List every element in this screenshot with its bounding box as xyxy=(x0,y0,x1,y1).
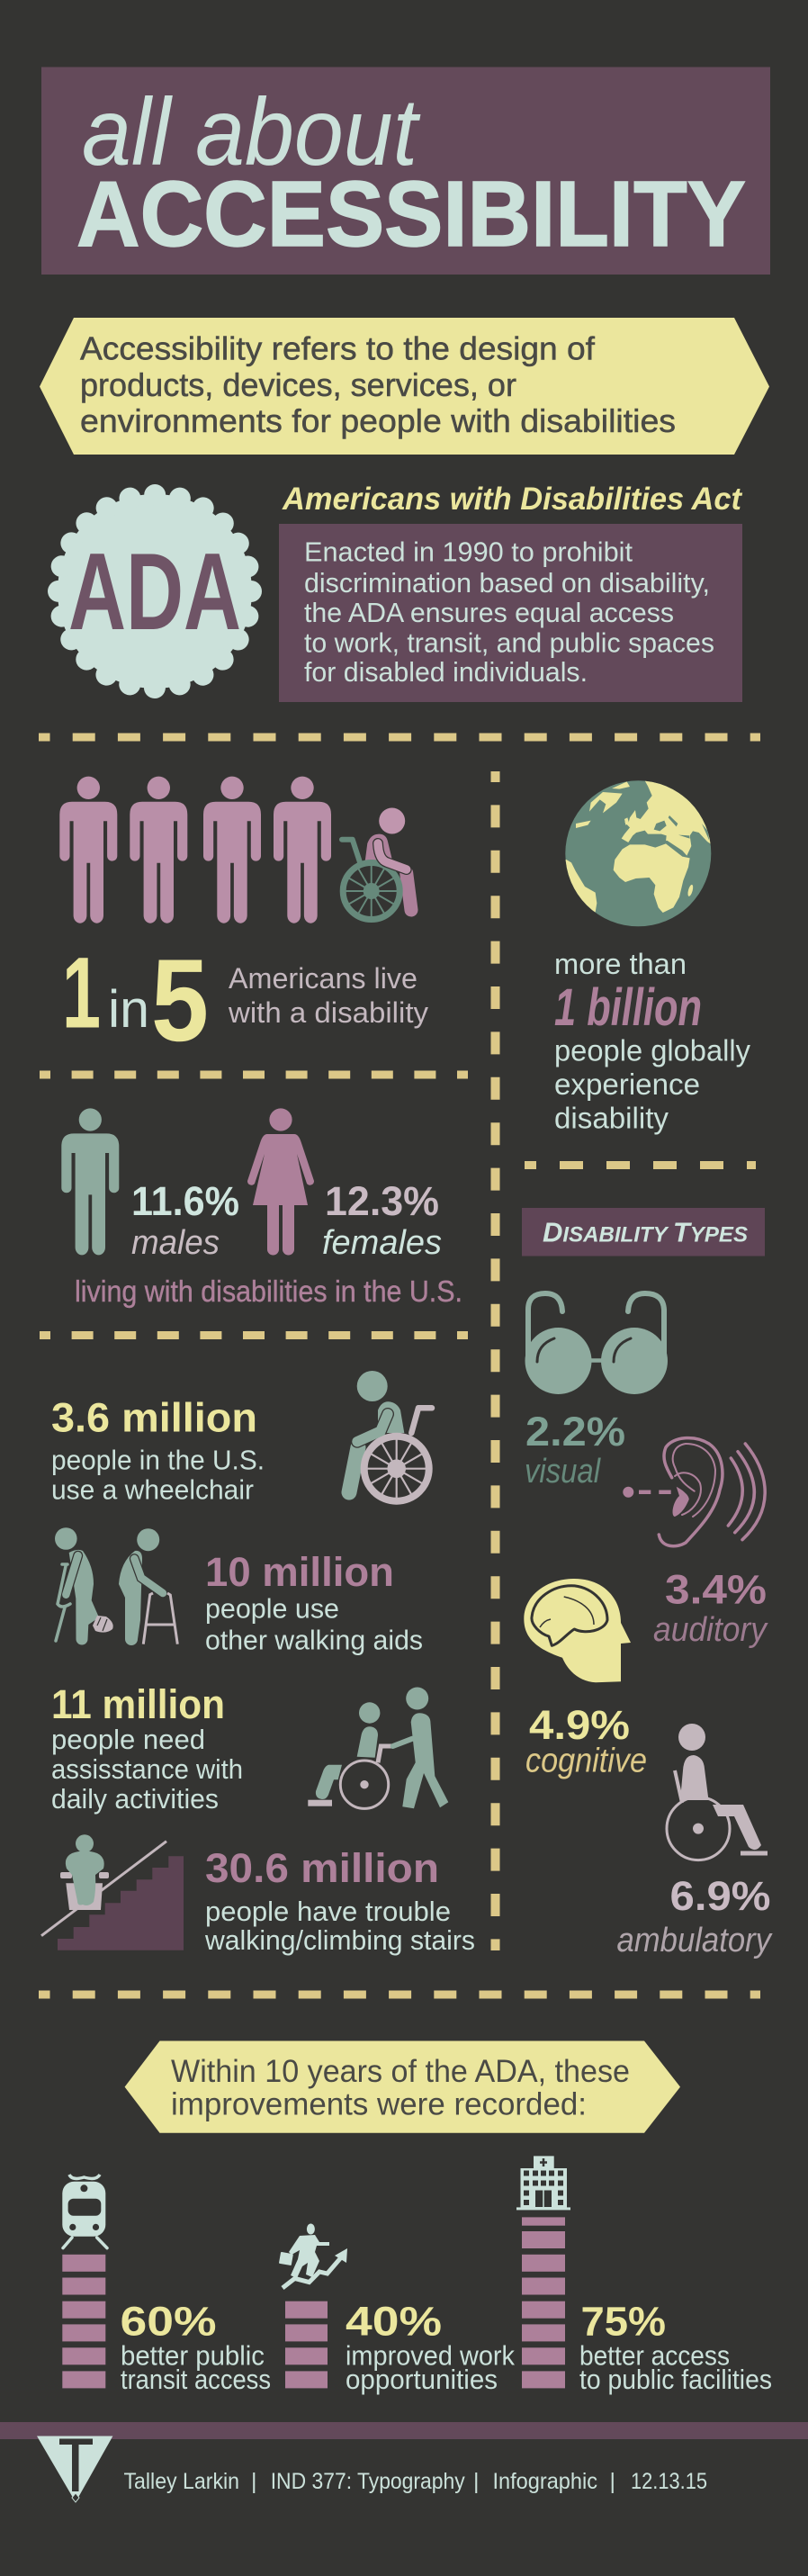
stat: cognitive: 4.9% xyxy=(529,1702,630,1748)
logo: T monogram xyxy=(37,2436,112,2502)
stat: auditory: 3.4% xyxy=(665,1566,767,1613)
stat: 40 percent xyxy=(346,2299,515,2395)
stat: 10 million walking aids: 10 million xyxy=(205,1549,394,1595)
stat: 1 in 5: 1 xyxy=(62,936,101,1049)
icon: stair lift xyxy=(41,1834,184,1950)
chart: 75 percent bar xyxy=(522,2217,565,2388)
icon: businessman climbing arrow xyxy=(279,2223,347,2288)
footer credits: | xyxy=(610,2469,615,2494)
definition banner: Accessibility refers to the design of xyxy=(80,329,596,367)
stat: 40 percent: improved work xyxy=(346,2340,515,2371)
stat: 30.6 million stairs: people have trouble xyxy=(205,1896,451,1927)
heading: Disability Types xyxy=(522,1208,765,1256)
stat: 30.6 million stairs: walking/climbing stairs xyxy=(204,1924,475,1956)
stat: 1 in 5: 5 xyxy=(151,934,209,1066)
stat: 3.6 million wheelchair users: 3.6 million xyxy=(51,1395,257,1440)
stat: 60 percent: better public xyxy=(121,2340,265,2371)
chart: 40 percent bar xyxy=(285,2301,328,2388)
heading: Disability Types: DISABILITY TYPES xyxy=(543,1217,748,1247)
footer credits: | xyxy=(473,2469,479,2494)
icon: ambulatory wheelchair user xyxy=(667,1724,768,1860)
ADA description panel: Enacted in 1990 to prohibit xyxy=(304,536,633,567)
footer credits: Infographic xyxy=(493,2469,597,2494)
icon: people with crutch and walker xyxy=(55,1527,177,1645)
icon: glasses xyxy=(525,1293,668,1394)
footer credits: | xyxy=(251,2469,257,2494)
icon: female figure xyxy=(247,1108,314,1255)
stat: males and females: males xyxy=(131,1224,220,1262)
icon: person in wheelchair xyxy=(342,808,411,920)
definition banner xyxy=(40,318,769,455)
stat: 3.6 million wheelchair users xyxy=(51,1395,265,1505)
ADA badge: ADA xyxy=(68,530,241,653)
stat: males and females: 12.3% xyxy=(325,1178,439,1224)
stat: 1 in 5: with a disability xyxy=(228,996,428,1029)
stat: 75 percent: to public facilities xyxy=(579,2364,772,2395)
definition banner: environments for people with disabilities xyxy=(80,402,676,439)
stat: 11 million assistance: people need xyxy=(51,1724,205,1755)
heading: Americans with Disabilities Act: Americans with Disabilities Act xyxy=(282,482,742,517)
text: more than 1 billion: people globally xyxy=(554,1033,750,1067)
stat: 75 percent: better access xyxy=(579,2340,730,2371)
stat: ambulatory: ambulatory xyxy=(617,1922,773,1959)
stat: visual xyxy=(525,1409,625,1491)
stat: 3.6 million wheelchair users: people in the U.S. xyxy=(51,1444,265,1476)
text: more than 1 billion: disability xyxy=(554,1102,669,1134)
stat: males and females: living with disabilities in the U.S. xyxy=(75,1274,462,1308)
icon: four standing people xyxy=(59,777,331,923)
ADA description panel: to work, transit, and public spaces xyxy=(304,626,714,659)
ADA description panel xyxy=(279,524,742,702)
stat: 10 million walking aids xyxy=(205,1549,423,1656)
stat: 10 million walking aids: other walking aids xyxy=(205,1624,423,1656)
stat: visual: visual xyxy=(525,1453,601,1491)
icon: person pushing wheelchair xyxy=(308,1687,448,1808)
footer credits: Talley Larkin xyxy=(124,2469,239,2494)
ADA description panel: discrimination based on disability, xyxy=(304,567,710,599)
chart: 60 percent bar xyxy=(62,2255,105,2388)
stat: 11 million assistance: 11 million xyxy=(51,1681,225,1727)
stat: 11 million assistance xyxy=(51,1681,243,1815)
icon: hospital building xyxy=(516,2156,570,2210)
stat: 1 in 5: Americans live xyxy=(229,962,417,995)
stat: 60 percent: 60% xyxy=(121,2299,216,2345)
icon: wheelchair user xyxy=(349,1371,432,1501)
footer band xyxy=(0,2422,808,2439)
ADA description panel: for disabled individuals. xyxy=(304,656,588,688)
footer credits: 12.13.15 xyxy=(631,2469,707,2494)
title banner xyxy=(41,67,770,275)
stat: cognitive xyxy=(525,1702,647,1780)
stat: 1 in 5: in xyxy=(108,980,149,1039)
icon: male figure xyxy=(61,1108,119,1255)
text: more than 1 billion: experience xyxy=(554,1067,700,1101)
stat: 1 in 5 xyxy=(62,934,428,1066)
ADA description panel: the ADA ensures equal access xyxy=(304,597,674,628)
stat: males and females: 11.6% xyxy=(131,1178,239,1224)
ADA badge xyxy=(58,494,252,689)
stat: 30.6 million stairs xyxy=(204,1845,475,1956)
stat: 75 percent: 75% xyxy=(581,2299,666,2345)
text: more than 1 billion xyxy=(554,948,750,1134)
stat: males and females: females xyxy=(322,1224,442,1262)
icon: train xyxy=(62,2175,107,2248)
icon: head with brain xyxy=(524,1579,631,1682)
stat: auditory xyxy=(653,1566,768,1649)
improvements banner: Within 10 years of the ADA, these xyxy=(171,2054,630,2089)
icon: globe xyxy=(564,774,717,926)
footer credits xyxy=(124,2469,707,2494)
stat: cognitive: cognitive xyxy=(525,1743,647,1780)
definition banner: products, devices, services, or xyxy=(80,366,516,403)
stat: 10 million walking aids: people use xyxy=(205,1593,339,1624)
title line: ACCESSIBILITY: ACCESSIBILITY xyxy=(76,162,746,266)
stat: 75 percent xyxy=(579,2299,772,2395)
stat: ambulatory: 6.9% xyxy=(669,1873,770,1919)
stat: 40 percent: 40% xyxy=(346,2299,442,2345)
stat: 11 million assistance: daily activities xyxy=(51,1783,219,1815)
footer credits: IND 377: Typography xyxy=(271,2469,465,2494)
stat: auditory: auditory xyxy=(653,1611,768,1649)
stat: 60 percent xyxy=(121,2299,271,2395)
stat: 40 percent: opportunities xyxy=(346,2364,498,2395)
stat: visual: 2.2% xyxy=(525,1409,625,1455)
stat: 30.6 million stairs: 30.6 million xyxy=(205,1845,439,1891)
stat: males and females xyxy=(75,1178,462,1308)
text: more than 1 billion: 1 billion xyxy=(554,978,702,1037)
stat: ambulatory xyxy=(617,1873,773,1959)
text: more than 1 billion: more than xyxy=(554,948,687,980)
stat: 60 percent: transit access xyxy=(121,2364,271,2395)
stat: 3.6 million wheelchair users: use a wheelchair xyxy=(51,1474,254,1505)
improvements banner: improvements were recorded: xyxy=(171,2086,587,2122)
improvements banner xyxy=(125,2041,680,2133)
title line: all about: all about xyxy=(82,79,421,185)
stat: 11 million assistance: assisstance with xyxy=(51,1753,243,1785)
icon: ear with sound waves xyxy=(623,1438,765,1546)
